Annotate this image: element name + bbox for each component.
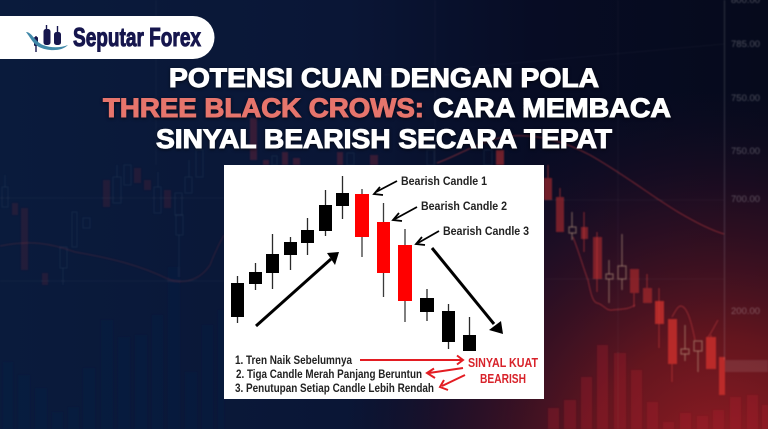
criterion 1: 1. Tren Naik Sebelumnya (235, 355, 353, 367)
candle wicks (548, 165, 711, 382)
candles right bottom (655, 301, 725, 395)
logo wordmark: Seputar Forex (73, 22, 201, 52)
title line 2 rest: CARA MEMBACA (433, 93, 671, 123)
axis labels: 785.00 (731, 39, 760, 50)
logo pill (0, 16, 214, 59)
callout: bearish candle 3 (416, 224, 529, 245)
candles: three bearish red (355, 189, 412, 322)
callout: bearish candle 1 (374, 174, 487, 195)
callout: bearish candle 2: Bearish Candle 2 (421, 199, 507, 213)
signal label (468, 355, 538, 386)
arrow: uptrend (256, 252, 339, 326)
callout: bearish candle 1: Bearish Candle 1 (401, 174, 487, 188)
title line 3: SINYAL BEARISH SECARA TEPAT (156, 124, 612, 154)
moving average lines (0, 136, 724, 340)
callout: bearish candle 2 (393, 199, 507, 221)
axis labels: 700.00 (731, 194, 760, 205)
hollow candles right (569, 212, 702, 372)
panel: three black crows diagram (224, 165, 544, 399)
signal label: BEARISH (480, 371, 526, 386)
axis labels (731, 0, 760, 317)
axis labels: 750.00 (731, 93, 760, 104)
faint hollow candles (2, 135, 492, 285)
criterion 3: 3. Penutupan Setiap Candle Lebih Rendah (235, 383, 434, 395)
candles: uptrend (231, 176, 349, 323)
title line 1: POTENSI CUAN DENGAN POLA (169, 63, 599, 93)
volume bars right (548, 345, 768, 429)
candles right top (496, 150, 652, 303)
signal label: SINYAL KUAT (468, 355, 538, 370)
price axis (724, 0, 768, 372)
faint candles above panel (250, 118, 378, 165)
criterion 2: 2. Tiga Candle Merah Panjang Beruntun (236, 369, 422, 381)
logo icon: candles and swoosh (26, 25, 68, 52)
red arrows to signal (360, 356, 465, 390)
callout: bearish candle 3: Bearish Candle 3 (443, 224, 529, 238)
arrow: downtrend (432, 248, 503, 334)
axis labels: 750.00 (731, 146, 760, 157)
title line 2 highlight: THREE BLACK CROWS: (103, 93, 424, 123)
faint candles left (12, 168, 171, 285)
volume bars left (3, 267, 224, 429)
candles: after decline (420, 289, 476, 351)
list of criteria (235, 355, 434, 395)
title (103, 63, 671, 154)
axis labels: 200.00 (731, 306, 760, 317)
